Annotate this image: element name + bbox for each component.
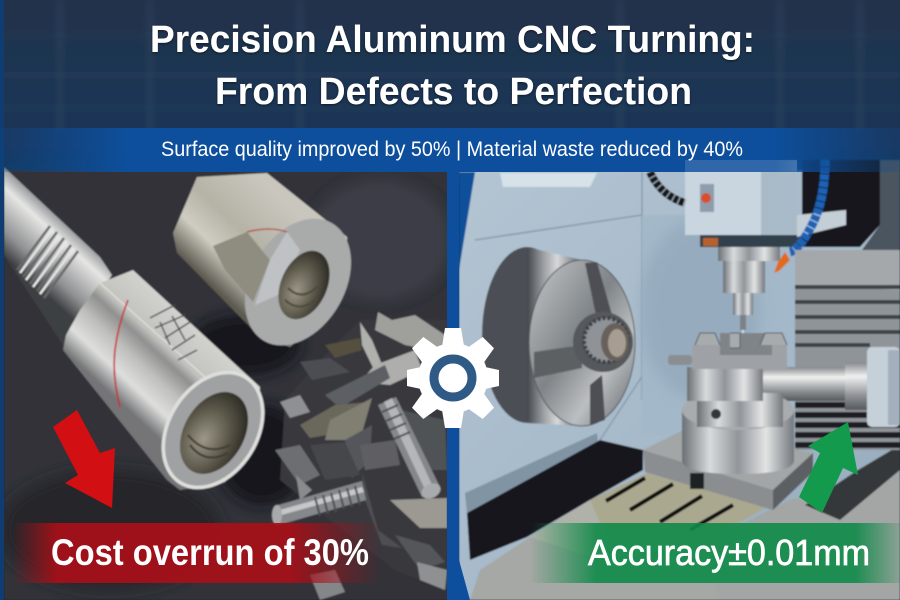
subtitle banner [0, 128, 900, 172]
spindle head [685, 160, 810, 346]
machine bed [465, 433, 900, 600]
icon: green up arrow [799, 422, 858, 513]
panel: precision machine photo [459, 160, 900, 600]
damaged nut [63, 270, 283, 506]
panel: defects photo [0, 167, 450, 600]
chuck [482, 247, 635, 426]
subtitle banner: Surface quality improved by 50% | Material waste reduced by 40% [161, 138, 743, 161]
chamfered nut [173, 173, 373, 364]
callout: accuracy [530, 523, 900, 583]
icon: red down arrow [53, 410, 115, 508]
machined workpiece [668, 333, 794, 474]
tailstock and quill [763, 347, 900, 427]
title: From Defects to Perfection [215, 71, 692, 113]
coolant hose [650, 160, 825, 273]
fixture plate [590, 430, 813, 545]
way cover bellows [795, 250, 900, 450]
metal scrap pile [272, 312, 447, 600]
bolt: upright [378, 397, 443, 502]
dark upper housing [797, 160, 900, 250]
left edge band [0, 0, 4, 600]
divider band [447, 168, 470, 600]
icon: central gear [407, 328, 499, 428]
panel: header factory background [0, 0, 900, 180]
callout: accuracy: Accuracy±0.01mm [588, 532, 870, 573]
callout: cost overrun [12, 523, 382, 583]
bolt: lying [272, 481, 366, 525]
threaded shaft [4, 167, 112, 345]
title: Precision Aluminum CNC Turning: [150, 19, 755, 61]
callout: cost overrun: Cost overrun of 30% [51, 532, 369, 573]
title [150, 19, 755, 113]
